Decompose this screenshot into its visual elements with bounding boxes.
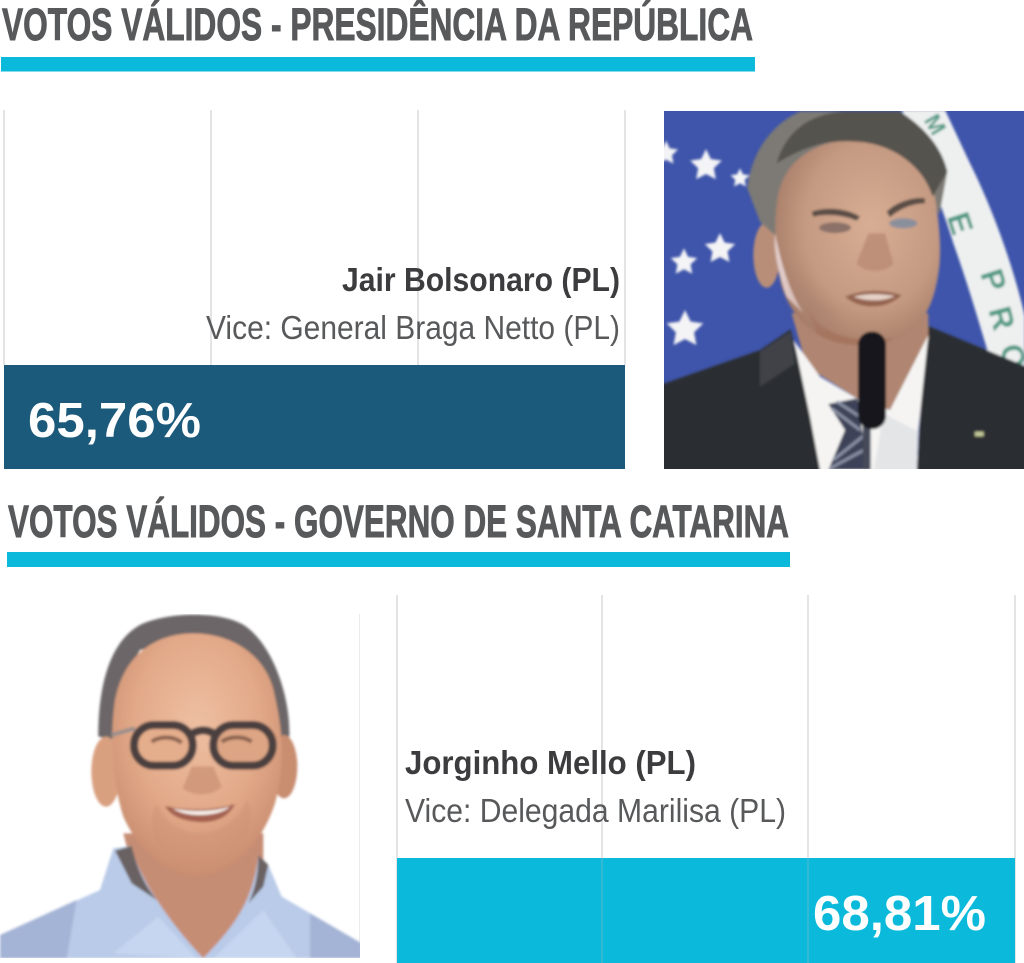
suit [660, 325, 1024, 473]
smile [165, 804, 235, 822]
neck [123, 833, 263, 958]
bar chart: presidência [4, 110, 625, 469]
candidate name: Jair Bolsonaro: Jair Bolsonaro (PL) [342, 261, 620, 298]
shirt [66, 845, 312, 958]
heading underline [1, 57, 755, 72]
heading underline [7, 552, 790, 567]
vice: Delegada Marilisa: Vice: Delegada Marilisa (PL) [405, 792, 786, 829]
bar: 65,76% [4, 365, 625, 469]
bar chart: governo [397, 595, 1015, 963]
shirt [794, 335, 928, 473]
photo: Jair Bolsonaro: R [982, 302, 1022, 334]
photo: Jair Bolsonaro [654, 109, 1024, 473]
value: 68,81%: 68,81% [813, 887, 986, 941]
ears [91, 737, 121, 807]
skin highlights and shadows [775, 233, 803, 313]
vice: General Braga Netto: Vice: General Braga Netto (PL) [206, 309, 620, 346]
photo: Jorginho Mello [0, 614, 362, 958]
bar: 68,81% [397, 858, 1015, 963]
face [775, 139, 940, 345]
banner band [902, 110, 1024, 367]
microphone [863, 420, 871, 470]
photo: Jair Bolsonaro: P [973, 264, 1014, 296]
neck [792, 313, 928, 410]
value: 65,76%: 65,76% [28, 394, 201, 448]
hair top [777, 112, 947, 197]
panel: governo de Santa Catarina [0, 496, 1015, 963]
glasses [112, 725, 273, 766]
candidate name: Jorginho Mello: Jorginho Mello (PL) [405, 744, 696, 781]
nose [183, 767, 222, 794]
nose [857, 233, 893, 271]
mouth [845, 291, 902, 306]
eyes [819, 222, 851, 233]
hair [98, 615, 289, 740]
photo: Jair Bolsonaro: M [919, 109, 951, 139]
eyebrows [812, 209, 860, 221]
ear [753, 222, 780, 288]
collar shadow [115, 846, 268, 903]
photo: Jair Bolsonaro: E [940, 208, 981, 239]
hair sides [747, 112, 947, 237]
face [112, 633, 282, 876]
tie [828, 398, 870, 470]
panel: presidência [1, 0, 1024, 473]
pin [975, 432, 984, 436]
stars [654, 141, 749, 345]
eyes [152, 738, 182, 743]
